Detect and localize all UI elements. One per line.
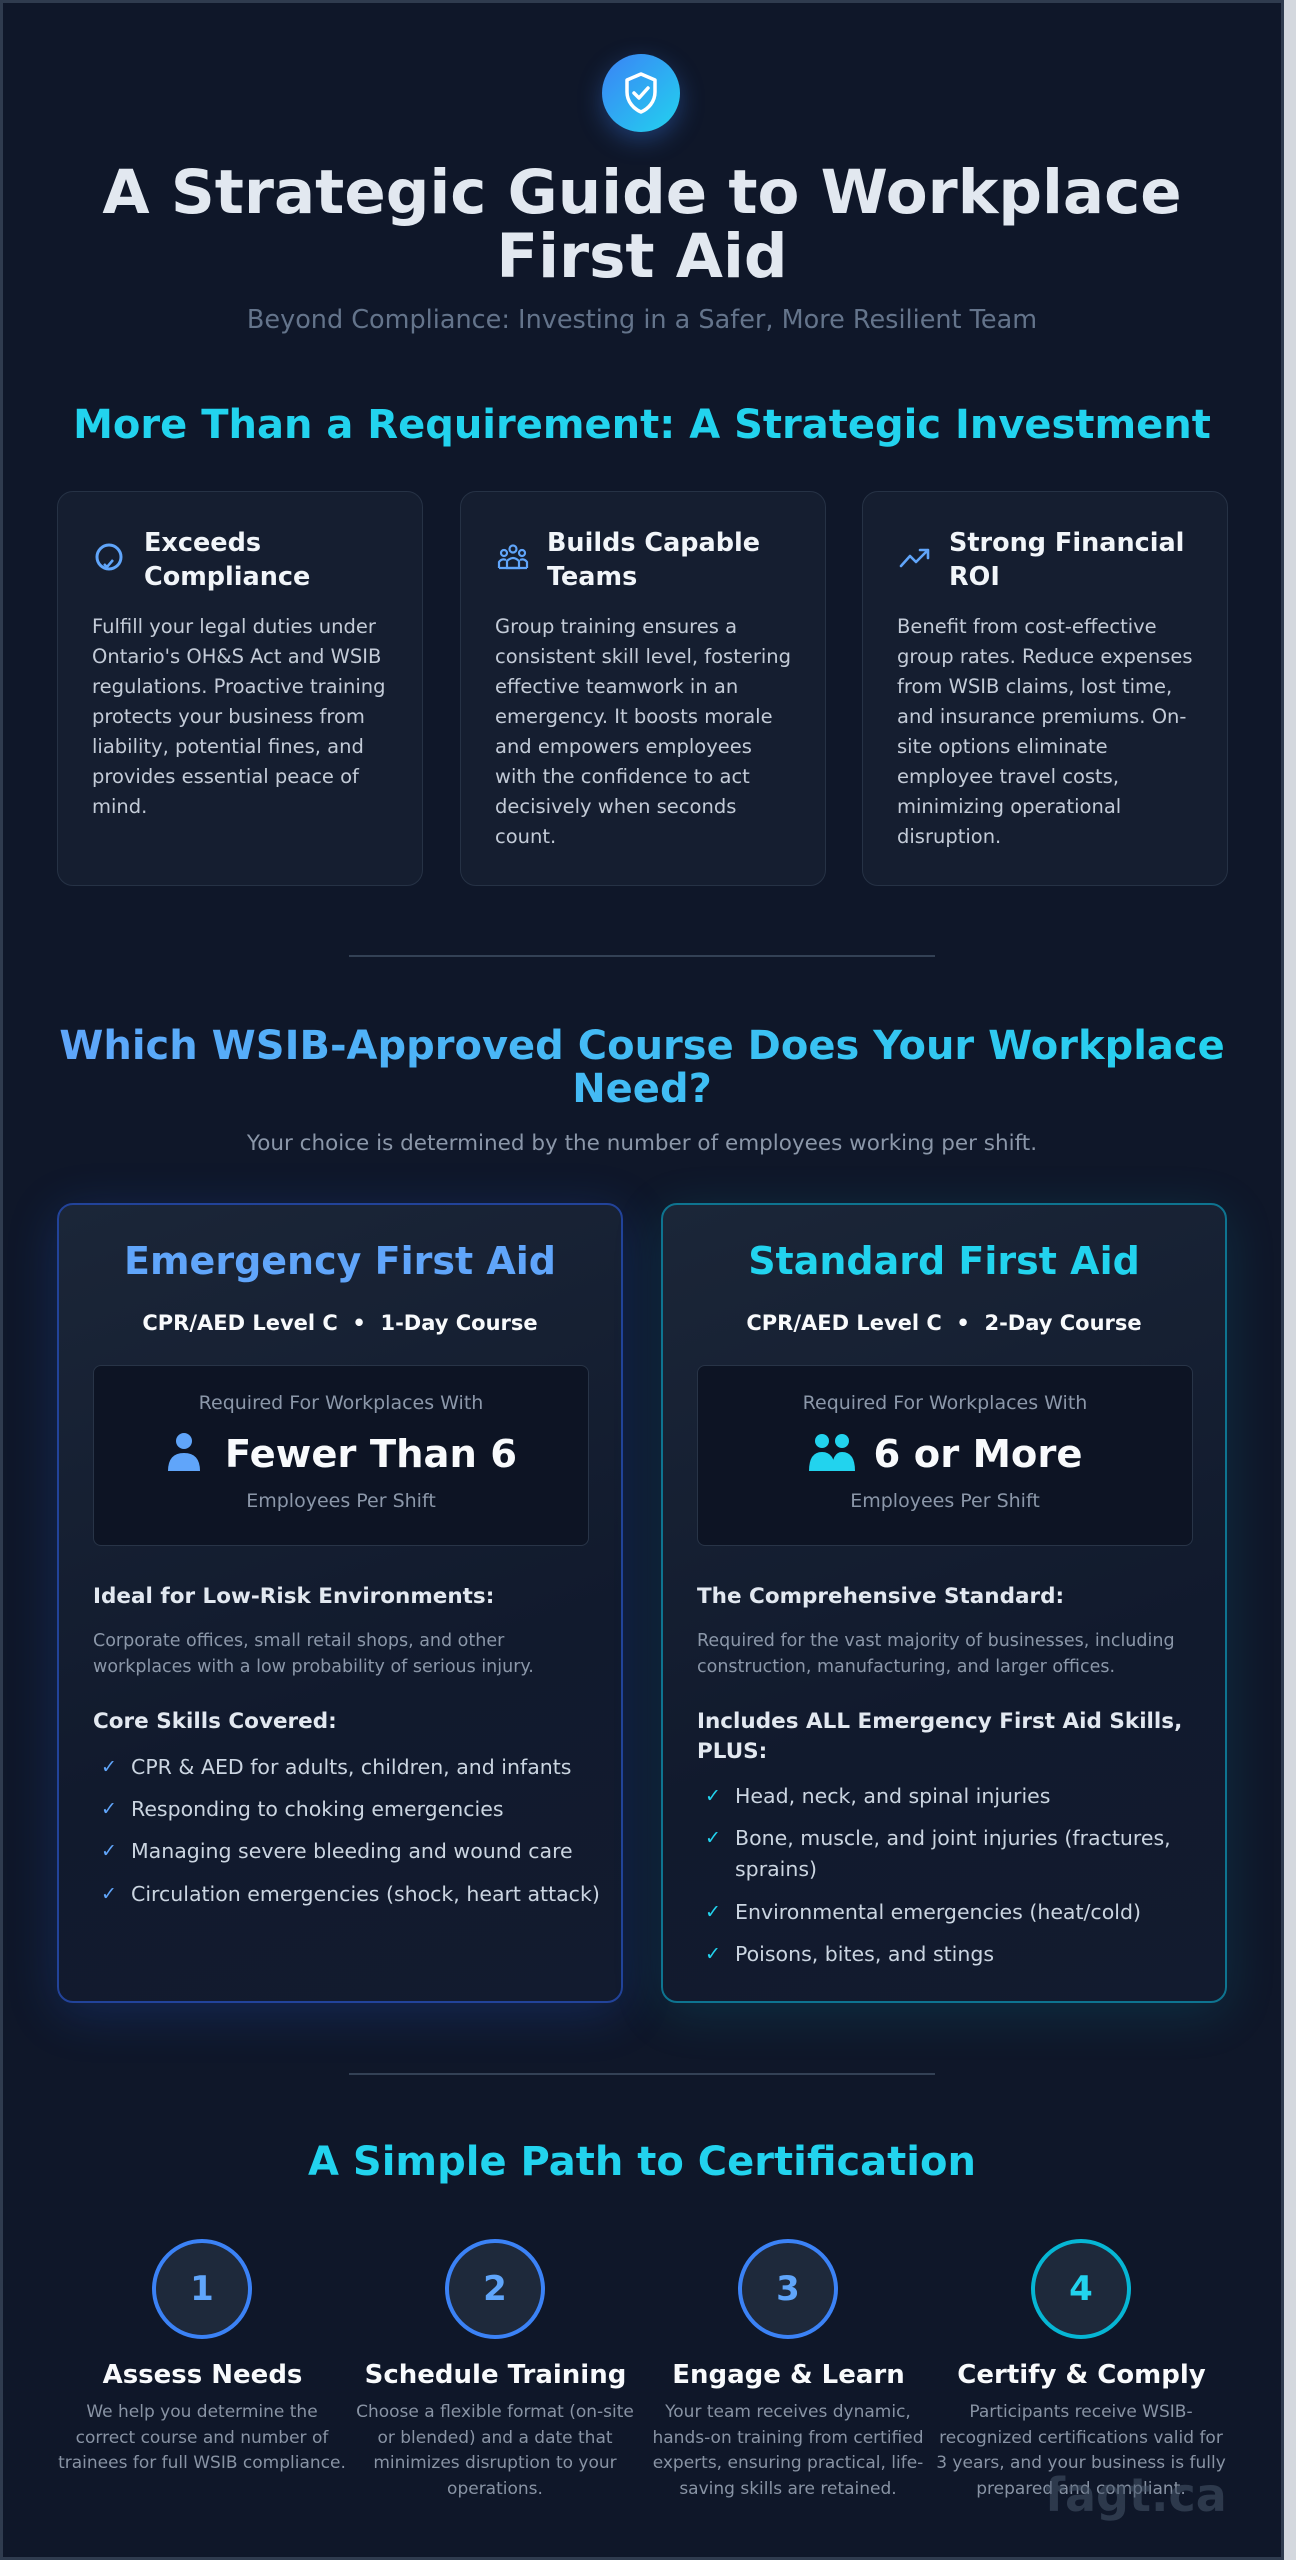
requirement box [93,1365,589,1546]
skills list: CPR & AED for adults, children, and infants [131,1755,571,1779]
step 4 circle [1031,2239,1131,2339]
skills list: Managing severe bleeding and wound care [131,1839,573,1863]
panel: financial ROI [862,491,1228,886]
card title: Builds Capable [547,528,760,558]
requirement box: Fewer Than 6 [225,1432,517,1477]
panel: emergency first aid [57,1203,623,2003]
subheading: Your choice is determined by the number of employees working per shift. [247,1131,1037,1156]
skills list: Responding to choking emergencies [131,1797,504,1821]
title: A Strategic Guide to Workplace [102,157,1182,228]
skills heading: Core Skills Covered: [93,1709,337,1734]
panel: standard first aid [661,1203,1227,2003]
icon: trending up [900,548,930,568]
step 3 desc: hands-on training from certified [652,2428,924,2448]
card title: ROI [949,562,1000,592]
step 1 desc [58,2402,346,2473]
step 2 title: Schedule Training [365,2360,626,2390]
step 4 circle: 4 [1069,2269,1093,2309]
card title [949,528,1184,592]
skills list: Bone, muscle, and joint injuries (fractures, sprains) [735,1826,1171,1881]
step 1 desc: We help you determine the [86,2402,318,2422]
card body: Group training ensures a consistent skill level, fostering effective teamwork in an emergency. It boosts morale and empowers employees with the confidence to act decisively when seconds count. [495,615,791,848]
skills list: ✓ [705,1785,721,1807]
skills list: Environmental emergencies (heat/cold) [735,1900,1141,1924]
step 3 circle [738,2239,838,2339]
watermark: fagt.ca [1045,2468,1227,2522]
card title: Teams [547,562,637,592]
icon: shield logo [602,54,680,132]
course title: Emergency First Aid [124,1239,556,1283]
title: First Aid [496,221,788,292]
requirement box: Employees Per Shift [246,1490,436,1512]
card title: Compliance [144,562,310,592]
step 2 circle [445,2239,545,2339]
step 4 desc: Participants receive WSIB- [969,2402,1193,2422]
step 4 title: Certify & Comply [957,2360,1206,2390]
card title [144,528,310,592]
step 3 desc: saving skills are retained. [679,2478,897,2498]
step 3 desc: experts, ensuring practical, life- [653,2453,923,2473]
title [102,157,1182,292]
course subtitle: CPR/AED Level C • 1-Day Course [142,1311,538,1335]
step 3 circle: 3 [776,2269,800,2309]
card body: Benefit from cost-effective group rates. Reduce expenses from WSIB claims, lost time, and insurance premiums. On-site options eliminate employee travel costs, minimizing operational disruption. [897,615,1193,848]
card title: Exceeds [144,528,261,558]
skills list: ✓ [705,1943,721,1965]
step 4 desc [936,2402,1226,2498]
step 3 desc [652,2402,924,2498]
step 2 desc [356,2402,634,2498]
card title [547,528,760,592]
step 2 desc: Choose a flexible format (on-site [356,2402,634,2422]
step 4 desc: 3 years, and your business is fully [936,2453,1226,2473]
step 2 desc: minimizes disruption to your [373,2453,617,2473]
step 1 desc: correct course and number of [76,2428,328,2448]
heading: path to certification: A Simple Path to Certification [308,2139,976,2185]
skills list: ✓ [101,1798,117,1820]
step 1 desc: trainees for full WSIB compliance. [58,2453,346,2473]
icon: team [498,544,528,570]
heading: strategic investment: More Than a Requirement: A Strategic Investment [73,402,1211,448]
heading: which course: Which WSIB-Approved Course Does Your Workplace Need? [59,1023,1225,1112]
skills list: ✓ [705,1901,721,1923]
skills list: ✓ [101,1756,117,1778]
skills list: Circulation emergencies (shock, heart attack) [131,1882,600,1906]
card body: Fulfill your legal duties under Ontario's OH&S Act and WSIB regulations. Proactive training protects your business from liability, potential fines, and provides essential peace of mind. [92,615,386,818]
section heading: Ideal for Low-Risk Environments: [93,1584,494,1609]
step 4 desc: prepared and compliant. [976,2478,1186,2498]
step 1 circle [152,2239,252,2339]
step 2 desc: operations. [447,2478,543,2498]
section heading: The Comprehensive Standard: [697,1584,1064,1609]
skills list: Poisons, bites, and stings [735,1942,994,1966]
requirement box: Required For Workplaces With [199,1392,483,1414]
skills list: Head, neck, and spinal injuries [735,1784,1050,1808]
skills list [705,1784,1171,1966]
skills list: ✓ [101,1883,117,1905]
panel: exceeds compliance [57,491,423,886]
skills list: ✓ [705,1827,721,1849]
skills heading: Includes ALL Emergency First Aid Skills, PLUS: [697,1709,1182,1764]
subtitle: Beyond Compliance: Investing in a Safer, More Resilient Team [247,305,1037,335]
course title: Standard First Aid [748,1239,1140,1283]
requirement box: 6 or More [874,1432,1082,1477]
step 1 title: Assess Needs [103,2360,302,2390]
step 3 title: Engage & Learn [672,2360,905,2390]
card title: Strong Financial [949,528,1184,558]
description: Corporate offices, small retail shops, and other workplaces with a low probability of serious injury. [93,1631,534,1677]
requirement box: Employees Per Shift [850,1490,1040,1512]
step 2 circle: 2 [483,2269,507,2309]
icon: badge [96,544,122,570]
skills list [101,1755,600,1906]
panel: capable teams [460,491,826,886]
step 3 desc: Your team receives dynamic, [665,2402,911,2422]
requirement box: Required For Workplaces With [803,1392,1087,1414]
course subtitle: CPR/AED Level C • 2-Day Course [746,1311,1142,1335]
step 4 desc: recognized certifications valid for [939,2428,1223,2448]
skills list: ✓ [101,1840,117,1862]
step 2 desc: or blended) and a date that [377,2428,613,2448]
requirement box [697,1365,1193,1546]
step 1 circle: 1 [190,2269,214,2309]
description: Required for the vast majority of businesses, including construction, manufacturing, and larger offices. [697,1631,1175,1677]
